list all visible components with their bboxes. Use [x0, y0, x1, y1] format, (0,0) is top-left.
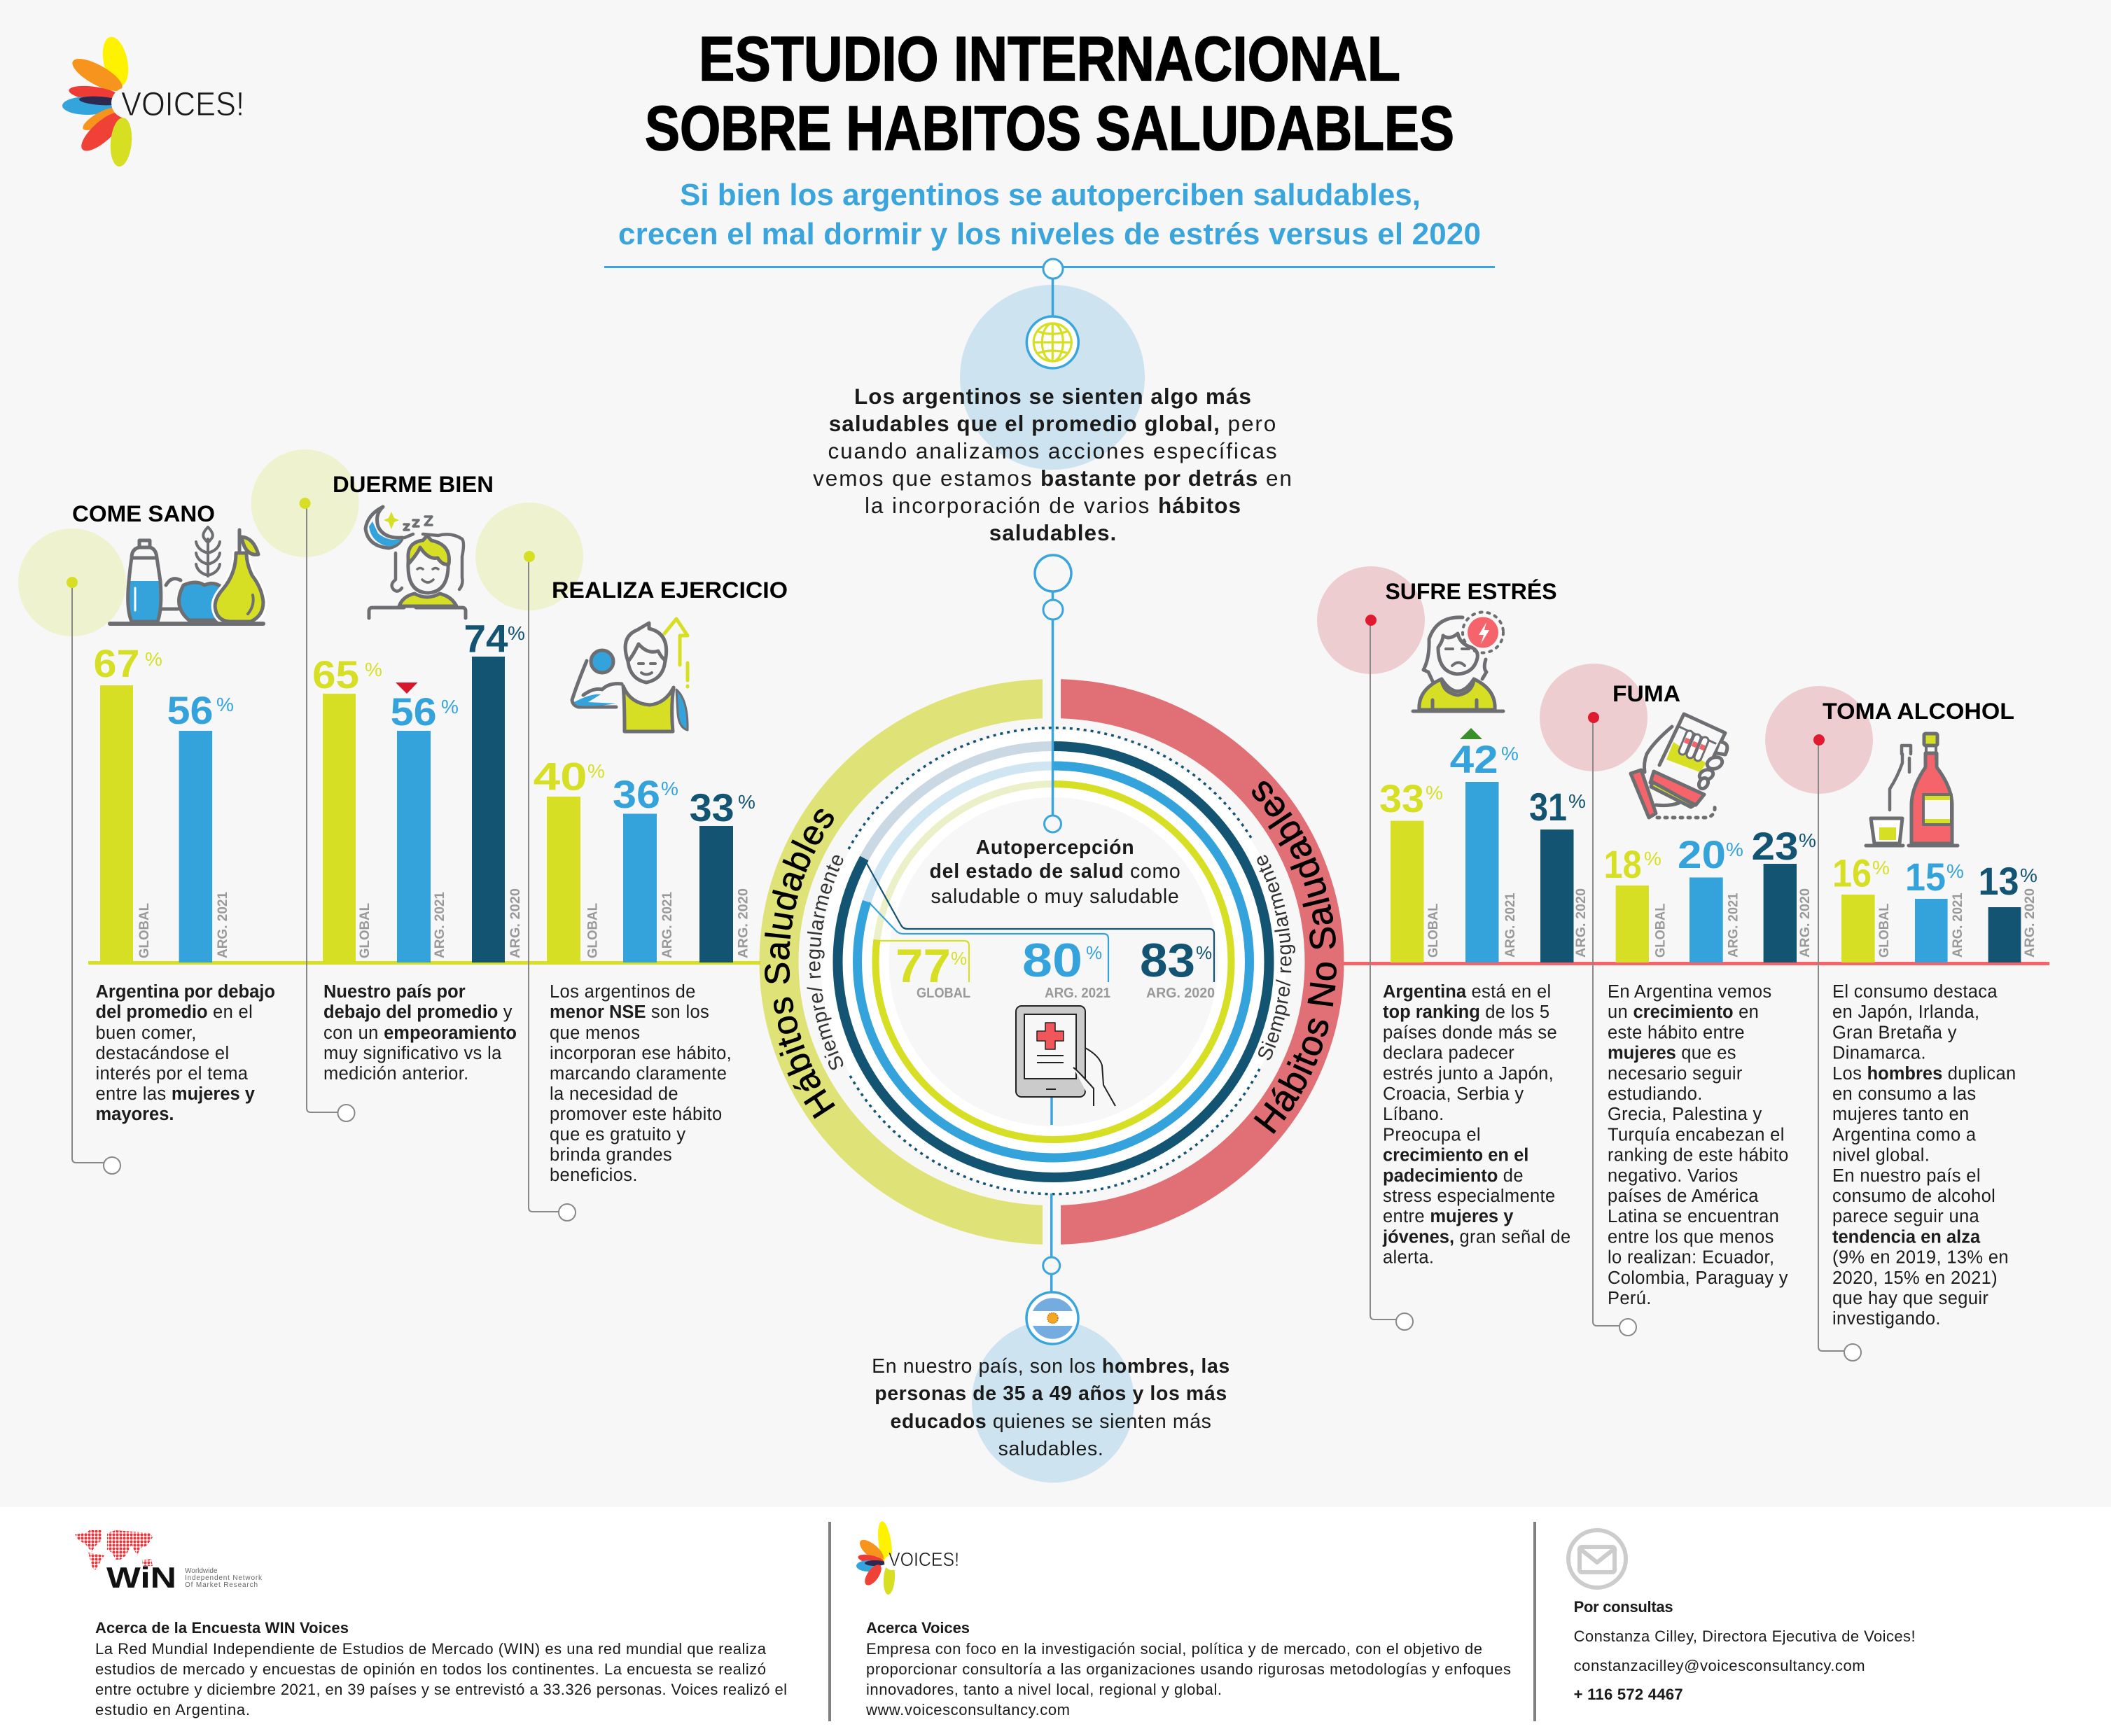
label: Hábitos No Saludables: Hábitos No Saludables — [1252, 781, 1337, 1134]
bar chart: 23 — [1752, 824, 1798, 868]
text: En Argentina vemos — [1608, 982, 1772, 1002]
bar chart: ARG. 2021 — [433, 892, 447, 958]
panel: come sano — [18, 501, 275, 1174]
bar chart: 15 — [1905, 855, 1946, 899]
text block: global comparison: vemos que estamos bastante por detrás en — [813, 465, 1293, 491]
connector: text to ring — [1035, 555, 1071, 728]
text — [550, 982, 732, 1185]
bar chart: 67 — [94, 641, 140, 685]
text: Los hombres duplican — [1832, 1064, 2016, 1084]
band: hábitos no saludables — [1061, 679, 1344, 1245]
panel: duerme bien — [251, 449, 525, 1121]
text: este hábito entre — [1608, 1023, 1745, 1042]
text: 2020, 15% en 2021) — [1832, 1268, 1998, 1288]
top light-blue circle — [960, 285, 1145, 470]
text: autopercepción: del estado de salud como — [930, 860, 1180, 883]
marker circle — [18, 528, 126, 636]
bar chart: GLOBAL — [358, 903, 372, 958]
text: Grecia, Palestina y — [1608, 1105, 1762, 1124]
connector — [1588, 712, 1636, 1336]
text: stress especialmente — [1383, 1186, 1556, 1206]
text: Dinamarca. — [1832, 1044, 1926, 1063]
text: ranking de este hábito — [1608, 1146, 1789, 1166]
icon: healthy food — [110, 527, 263, 624]
text: Croacia, Serbia y — [1383, 1084, 1524, 1104]
title: SOBRE HABITOS SALUDABLES — [645, 94, 1454, 164]
connector: ring centre — [1045, 728, 1061, 832]
text: Líbano. — [1383, 1105, 1444, 1124]
text: consumo de alcohol — [1832, 1186, 1995, 1206]
marker circle — [1317, 566, 1425, 674]
logo: Voices small — [856, 1520, 959, 1595]
connector — [524, 551, 576, 1221]
bar chart — [1832, 851, 2037, 962]
connector: header to globe — [1043, 259, 1063, 316]
text: Gran Bretaña y — [1832, 1023, 1957, 1042]
stat: 80 arg 2021: ARG. 2021 — [1045, 986, 1110, 1001]
bar chart: % — [216, 694, 234, 715]
inner disc — [889, 797, 1218, 1126]
text: estudio en Argentina. — [95, 1701, 250, 1718]
text: Argentina por debajo — [95, 982, 275, 1002]
dotted ring — [849, 728, 1260, 1194]
text: incorporan ese hábito, — [550, 1044, 732, 1063]
connector — [1365, 615, 1413, 1330]
text — [95, 982, 275, 1124]
label: Hábitos Saludables: Hábitos Saludables — [765, 809, 835, 1119]
text: Acerca de la Encuesta WIN Voices — [95, 1619, 349, 1637]
bar chart: ARG. 2020 — [737, 888, 751, 958]
stat: 77 global — [896, 939, 970, 1001]
text: entre mujeres y — [1383, 1207, 1514, 1226]
text block: Argentine profile: En nuestro país, son los hombres, las — [872, 1355, 1230, 1378]
text: brinda grandes — [550, 1145, 672, 1165]
stat: 77 global: 77 — [896, 939, 951, 993]
text: Colombia, Paraguay y — [1608, 1268, 1788, 1288]
bar chart — [534, 755, 755, 962]
bar chart: ARG. 2020 — [1798, 888, 1813, 958]
footer: WIN column — [75, 1530, 787, 1718]
bar chart: ARG. 2021 — [660, 892, 675, 958]
text: países de América — [1608, 1186, 1759, 1206]
text: mayores. — [95, 1105, 174, 1124]
bar chart: % — [145, 648, 162, 670]
divider — [828, 1522, 831, 1721]
bar chart: 20 — [1678, 832, 1726, 876]
bar chart: GLOBAL — [1877, 903, 1892, 958]
footer background — [0, 1507, 2111, 1736]
logo: WIN: Worldwide — [185, 1567, 218, 1575]
stat: 77 global: % — [951, 948, 967, 969]
text: negativo. Varios — [1608, 1166, 1739, 1186]
text: la necesidad de — [550, 1084, 678, 1104]
bar chart — [1604, 824, 1816, 962]
text block: global comparison: la incorporación de varios hábitos — [865, 493, 1241, 518]
bar chart: ARG. 2020 — [2023, 888, 2037, 958]
text: entre octubre y diciembre 2021, en 39 países y se entrevistó a 33.326 personas. Voices realizó el — [95, 1681, 787, 1698]
text: Latina se encuentran — [1608, 1207, 1779, 1226]
text: El consumo destaca — [1832, 982, 1998, 1002]
header rule — [604, 266, 1495, 268]
icon: bottles and glass — [1866, 734, 1958, 846]
text: en Japón, Irlanda, — [1832, 1002, 1979, 1022]
text: promover este hábito — [550, 1105, 723, 1124]
text — [1608, 982, 1789, 1308]
connector — [1813, 734, 1861, 1361]
white disc — [821, 729, 1286, 1194]
bar chart: 16 — [1832, 851, 1872, 895]
stat: 83 arg 2020: 83 — [1140, 934, 1195, 987]
bar chart: % — [365, 659, 382, 680]
text: que es gratuito y — [550, 1125, 686, 1144]
bar chart: 33 — [690, 785, 734, 830]
text: Constanza Cilley, Directora Ejecutiva de Voices! — [1574, 1628, 1916, 1645]
bar chart: ARG. 2021 — [1951, 892, 1965, 958]
text: investigando. — [1832, 1309, 1941, 1329]
text — [1832, 982, 2016, 1329]
band: hábitos saludables — [759, 679, 1043, 1245]
subtitle: crecen el mal dormir y los niveles de estrés versus el 2020 — [618, 217, 1481, 251]
text: padecimiento de — [1383, 1166, 1524, 1186]
text: innovadores, tanto a nivel local, regional y global. — [866, 1681, 1222, 1698]
text: Argentina como a — [1832, 1125, 1977, 1144]
logo: Voices: VOICES! — [121, 86, 244, 123]
bar chart — [94, 641, 234, 962]
bar chart: % — [1946, 860, 1964, 882]
text block: Argentine profile: saludables. — [998, 1438, 1103, 1460]
ring: global 77% — [875, 784, 1231, 1140]
text: que menos — [550, 1023, 640, 1043]
panel: toma alcohol — [1765, 686, 2037, 1361]
text: estudiando. — [1608, 1084, 1703, 1104]
icon: cigarettes — [1631, 714, 1727, 818]
text — [323, 982, 517, 1084]
divider — [1533, 1522, 1536, 1721]
marker circle — [251, 449, 359, 557]
text: Argentina está en el — [1383, 982, 1552, 1002]
text: alerta. — [1383, 1248, 1434, 1268]
text: + 116 572 4467 — [1574, 1686, 1683, 1703]
text: Por consultas — [1574, 1598, 1673, 1616]
bar chart: % — [1872, 857, 1890, 878]
axis: unhealthy habits — [1342, 962, 2049, 965]
ring: Arg 2021 80% — [857, 766, 1249, 1158]
text: un crecimiento en — [1608, 1002, 1759, 1022]
text: autopercepción: saludable o muy saludable — [931, 886, 1179, 908]
text: crecimiento en el — [1383, 1146, 1528, 1166]
text: Los argentinos de — [550, 982, 696, 1002]
icon: globe — [1026, 316, 1078, 368]
bottom light-blue circle — [972, 1320, 1134, 1483]
bar chart: 56 — [391, 690, 437, 734]
label: siempre regularmente right: Siempre/ regularmente — [1257, 855, 1295, 1060]
heading: DUERME BIEN — [333, 472, 494, 497]
text: Preocupa el — [1383, 1125, 1481, 1144]
title — [645, 24, 1454, 164]
marker circle — [1540, 664, 1647, 771]
text: Empresa con foco en la investigación social, política y de mercado, con el objetivo de — [866, 1640, 1482, 1658]
text: con un empeoramiento — [323, 1023, 517, 1043]
text: en consumo a las — [1832, 1084, 1976, 1104]
marker circle — [475, 503, 583, 610]
panel: realiza ejercicio — [475, 503, 788, 1221]
heading: REALIZA EJERCICIO — [552, 578, 788, 603]
text: países donde más se — [1383, 1023, 1557, 1042]
icon: person exercising — [572, 619, 688, 732]
stat: 83 arg 2020 — [1140, 934, 1215, 1001]
text: interés por el tema — [95, 1064, 249, 1084]
text — [1574, 1598, 1916, 1703]
text: autopercepción — [930, 836, 1180, 908]
subtitle: Si bien los argentinos se autoperciben saludables, — [680, 178, 1421, 212]
text: (9% en 2019, 13% en — [1832, 1248, 2009, 1268]
text: Turquía encabezan el — [1608, 1125, 1785, 1144]
bar chart: % — [508, 622, 525, 644]
logo: WIN: WiN — [106, 1561, 176, 1594]
text: debajo del promedio y — [323, 1002, 513, 1022]
text: beneficios. — [550, 1166, 638, 1185]
text: top ranking de los 5 — [1383, 1002, 1549, 1022]
icon: sleeping person — [365, 507, 466, 618]
bar chart: GLOBAL — [1654, 903, 1668, 958]
bar chart: % — [1568, 790, 1586, 812]
footer: contact column — [1568, 1530, 1916, 1703]
bar chart: ARG. 2021 — [216, 892, 230, 958]
text block: global comparison: saludables. — [989, 520, 1117, 545]
logo: WIN: Of Market Research — [185, 1581, 258, 1589]
bar chart: % — [1644, 848, 1661, 869]
logo: Voices small: VOICES! — [889, 1548, 959, 1570]
text block: global comparison: Los argentinos se sienten algo más — [854, 384, 1252, 409]
text: mujeres tanto en — [1832, 1105, 1970, 1124]
connector: ring to flag — [1043, 1194, 1060, 1294]
connector — [67, 577, 120, 1174]
bar chart: % — [441, 696, 459, 718]
text: autopercepción: Autopercepción — [976, 836, 1134, 859]
bar chart: 74 — [464, 617, 508, 661]
logo: WIN — [75, 1530, 263, 1594]
text: Acerca Voices — [866, 1619, 970, 1637]
heading: FUMA — [1612, 681, 1680, 706]
title: ESTUDIO INTERNACIONAL — [699, 24, 1400, 94]
bar chart: % — [1501, 743, 1519, 764]
text: constanzacilley@voicesconsultancy.com — [1574, 1657, 1865, 1674]
bar chart: ARG. 2021 — [1727, 892, 1741, 958]
bar chart: % — [1726, 839, 1743, 860]
text block: global comparison — [813, 384, 1293, 545]
text: menor NSE son los — [550, 1002, 709, 1022]
axis: healthy habits — [88, 961, 760, 965]
stat: 83 arg 2020: % — [1196, 942, 1212, 963]
heading: TOMA ALCOHOL — [1823, 699, 2014, 724]
text block: global comparison: cuando analizamos acciones específicas — [828, 438, 1279, 463]
bar chart: 13 — [1979, 859, 2019, 903]
text: marcando claramente — [550, 1064, 727, 1084]
label: siempre regularmente left: Siempre/ regularmente — [807, 855, 843, 1070]
text — [865, 1619, 1511, 1718]
stat: 80 arg 2021 — [1022, 934, 1110, 1001]
text: La Red Mundial Independiente de Estudios de Mercado (WIN) es una red mundial que realiza — [95, 1640, 767, 1658]
icon: stressed woman — [1413, 612, 1503, 711]
text: En nuestro país el — [1832, 1166, 1981, 1186]
callout lines — [866, 862, 1214, 982]
icon: Argentine flag — [1026, 1292, 1078, 1344]
bar chart: 36 — [613, 772, 660, 816]
bar chart: % — [1799, 830, 1816, 851]
text: lo realizan: Ecuador, — [1608, 1248, 1774, 1268]
bar chart: GLOBAL — [137, 903, 152, 958]
icon: mail — [1568, 1530, 1626, 1588]
text: medición anterior. — [323, 1064, 469, 1084]
bar chart: 56 — [167, 688, 213, 732]
bar chart: % — [661, 778, 678, 799]
text: necesario seguir — [1608, 1064, 1743, 1084]
subtitle — [618, 178, 1481, 251]
bar chart: 40 — [534, 755, 587, 798]
text: Nuestro país por — [323, 982, 466, 1002]
panel: fuma — [1540, 664, 1816, 1336]
panel: sufre estrés — [1317, 566, 1589, 1330]
text: proporcionar consultoría a las organizaciones usando rigurosas metodologías y enfoques — [866, 1660, 1511, 1678]
bar chart: % — [587, 760, 605, 782]
text: jóvenes, gran señal de — [1382, 1227, 1571, 1247]
text: destacándose el — [95, 1044, 229, 1063]
text: entre los que menos — [1608, 1227, 1774, 1247]
text: estudios de mercado y encuestas de opinión en todos los continentes. La encuesta se realizó — [95, 1660, 766, 1678]
icon: medical tablet — [1016, 1006, 1115, 1125]
bar chart — [312, 617, 525, 962]
text — [1382, 982, 1571, 1268]
text: tendencia en alza — [1832, 1227, 1981, 1247]
text: declara padecer — [1383, 1044, 1514, 1063]
logo: Voices — [62, 34, 244, 167]
bar chart: % — [2020, 864, 2037, 886]
text: entre las mujeres y — [95, 1084, 256, 1104]
bar chart: GLOBAL — [585, 903, 601, 958]
bar chart: GLOBAL — [1426, 903, 1441, 958]
text: buen comer, — [95, 1023, 197, 1043]
stat: 80 arg 2021: % — [1086, 942, 1102, 963]
text: mujeres que es — [1608, 1044, 1736, 1063]
text: estrés junto a Japón, — [1383, 1064, 1554, 1084]
bar chart: 31 — [1529, 785, 1567, 829]
bar chart: % — [738, 791, 755, 813]
bar chart: ARG. 2021 — [1503, 892, 1518, 958]
bar chart: 65 — [312, 652, 359, 696]
text: nivel global. — [1832, 1146, 1930, 1166]
bar chart — [1379, 728, 1589, 962]
text block: Argentine profile: educados quienes se sienten más — [891, 1410, 1211, 1433]
stat: 80 arg 2021: 80 — [1022, 934, 1082, 987]
text: del promedio en el — [95, 1002, 253, 1022]
text: muy significativo vs la — [323, 1044, 502, 1063]
text block: global comparison: saludables que el promedio global, pero — [829, 411, 1277, 436]
heading: SUFRE ESTRÉS — [1385, 579, 1557, 604]
bar chart: 18 — [1604, 842, 1642, 886]
text: www.voicesconsultancy.com — [865, 1701, 1070, 1718]
logo: WIN: Independent Network — [185, 1574, 263, 1582]
text: parece seguir una — [1832, 1207, 1980, 1226]
bar chart: ARG. 2020 — [1574, 888, 1589, 958]
bar chart: % — [1426, 782, 1443, 804]
heading: COME SANO — [72, 501, 215, 526]
ring: Arg 2020 83% — [837, 746, 1269, 1177]
panel: central ring — [759, 679, 1344, 1245]
bar chart: 33 — [1379, 776, 1424, 820]
stat: 83 arg 2020: ARG. 2020 — [1146, 986, 1215, 1001]
marker circle — [1765, 686, 1873, 794]
bar chart: ARG. 2020 — [508, 888, 523, 958]
text: Perú. — [1608, 1289, 1652, 1308]
stat: 77 global: GLOBAL — [917, 986, 970, 1001]
text block: Argentine profile — [872, 1355, 1230, 1460]
text: que hay que seguir — [1832, 1289, 1988, 1308]
text block: Argentine profile: personas de 35 a 49 años y los más — [875, 1382, 1227, 1405]
text — [95, 1619, 787, 1718]
footer: Voices column — [856, 1520, 1511, 1718]
connector — [300, 498, 354, 1121]
bar chart: 42 — [1450, 737, 1498, 781]
